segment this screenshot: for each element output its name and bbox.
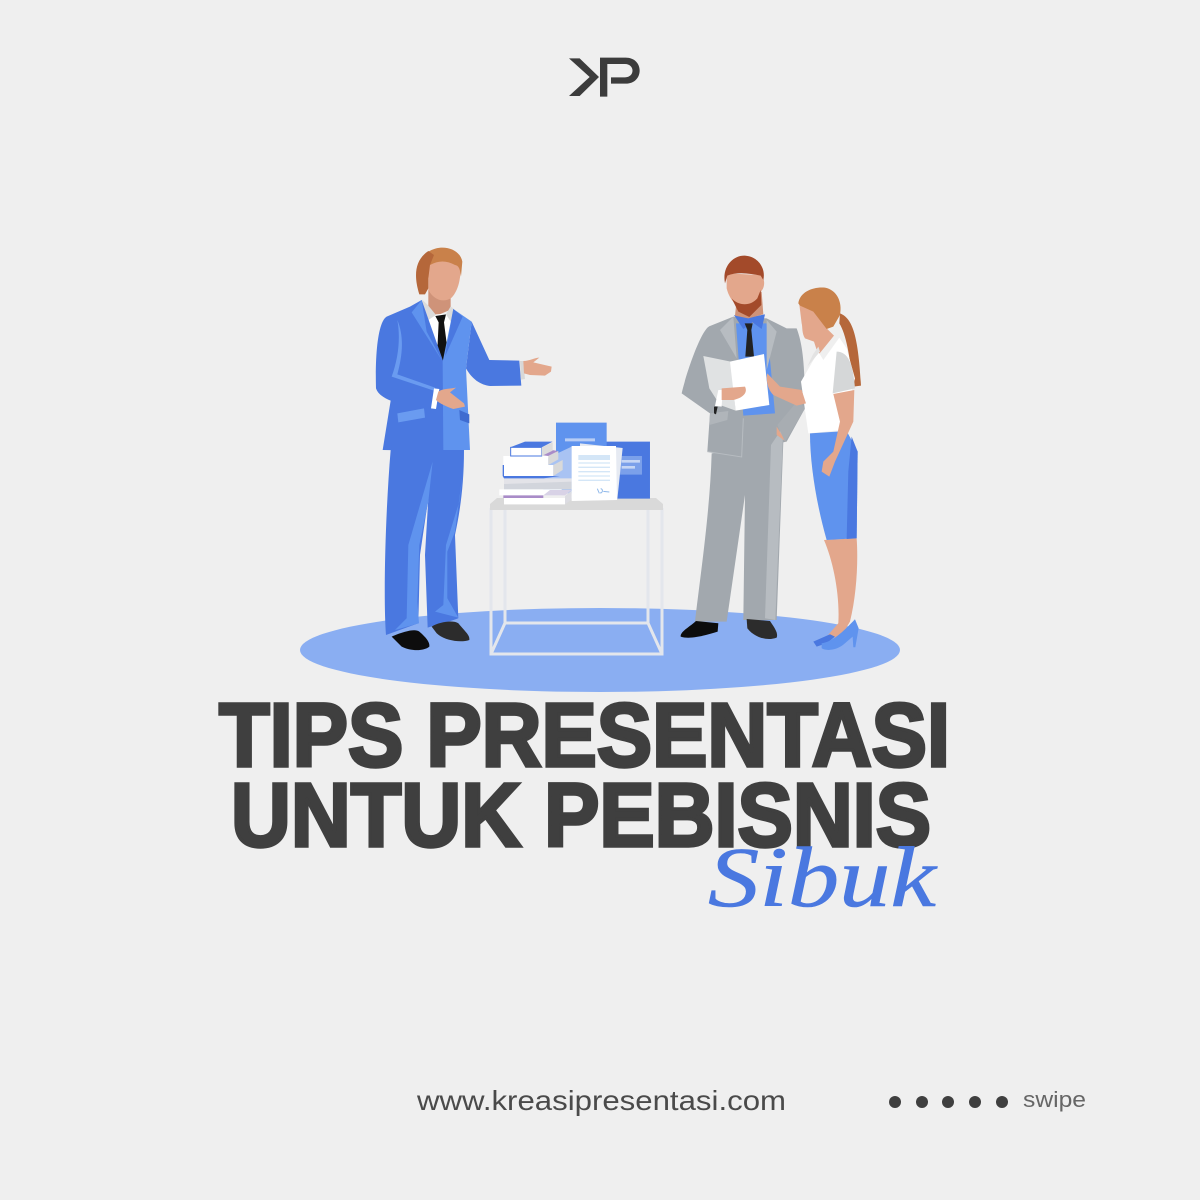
shoes xyxy=(681,621,718,638)
head xyxy=(428,260,461,300)
heels xyxy=(813,634,835,647)
head xyxy=(735,292,763,318)
illustration: businessman in grey suit xyxy=(681,256,805,639)
hair xyxy=(798,288,841,329)
website url: www.kreasipresentasi.com xyxy=(416,1085,786,1116)
document xyxy=(580,443,623,499)
title line 1: TIPS PRESENTASI xyxy=(219,686,950,786)
swipe indicator xyxy=(889,1087,1086,1112)
logo: KP xyxy=(569,58,640,97)
illustration: businesswoman xyxy=(767,288,861,650)
document held xyxy=(703,356,736,411)
trousers xyxy=(695,442,783,622)
blouse xyxy=(799,304,834,355)
illustration: books and documents xyxy=(499,423,650,504)
pagination dots xyxy=(889,1096,1008,1108)
floor ellipse xyxy=(300,608,900,692)
title xyxy=(219,686,950,866)
jacket xyxy=(376,300,447,451)
script word: Sibuk: Sibuk xyxy=(708,829,938,925)
forearm xyxy=(767,373,806,406)
book stack xyxy=(504,478,572,484)
ponytail xyxy=(839,313,861,387)
trousers xyxy=(385,450,464,635)
swipe label: swipe xyxy=(1023,1087,1086,1112)
legs xyxy=(824,538,857,638)
illustration: presenter in blue suit xyxy=(376,248,552,650)
title line 2: UNTUK PEBISNIS xyxy=(231,766,931,866)
illustration: table xyxy=(490,498,663,654)
skirt xyxy=(810,431,858,540)
shoes xyxy=(392,630,429,650)
